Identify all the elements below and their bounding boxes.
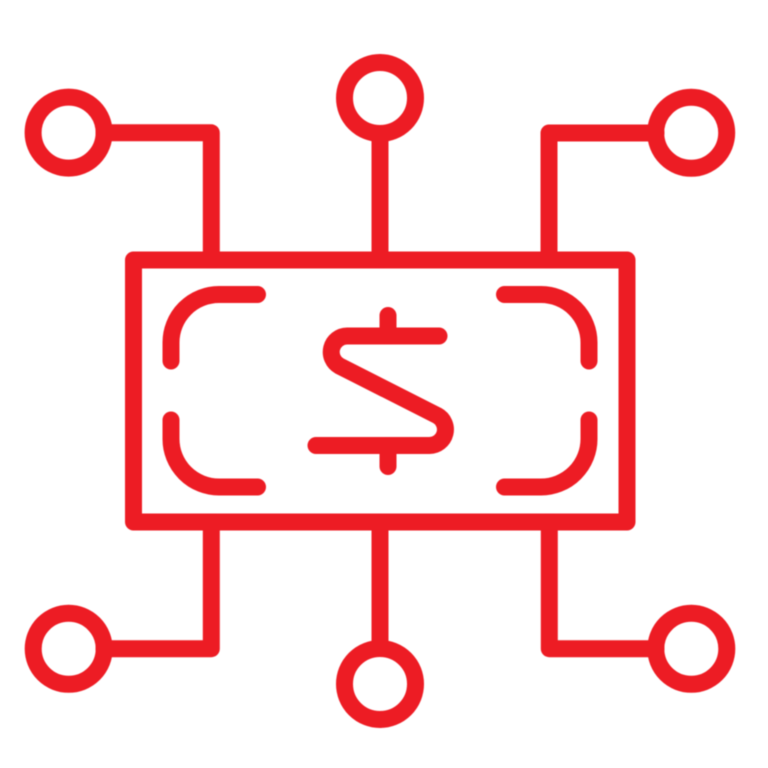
circuit node: bottom center — [344, 522, 416, 720]
dollar sign — [316, 316, 445, 466]
banknote outline — [134, 260, 627, 522]
circuit node: bottom right — [549, 522, 727, 684]
circuit node: bottom left — [33, 522, 211, 684]
circuit node: top center — [344, 62, 416, 260]
banknote inner frame corners — [171, 294, 589, 487]
circuit node: top right — [549, 97, 727, 260]
circuit node: top left — [33, 97, 211, 260]
